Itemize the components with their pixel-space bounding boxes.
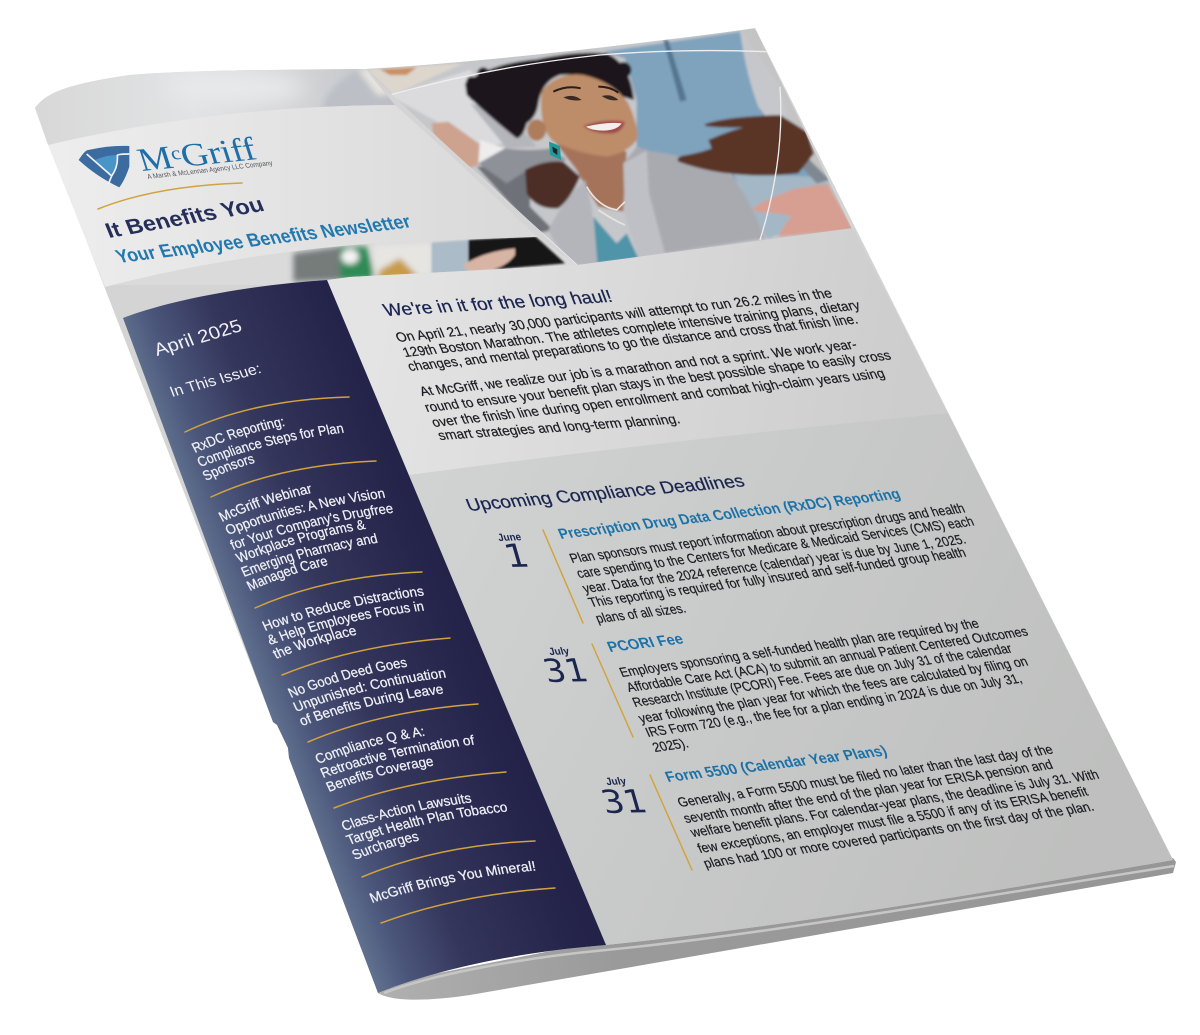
- lower photo strip: [158, 237, 566, 282]
- gold rule: [308, 704, 478, 742]
- panel: compliance deadlines: [409, 413, 1173, 945]
- intro text: changes, and mental preparations to go the distance and cross that finish line.: [405, 311, 860, 374]
- article: good deed: of Benefits During Leave: [300, 686, 444, 726]
- white photo arcs: [365, 51, 781, 265]
- PCORI text: 2025).: [650, 736, 691, 755]
- neck: [553, 140, 627, 212]
- article: lawsuits: Surcharges: [352, 834, 419, 859]
- RxDC text: year. Data for the 2024 reference (calendar) year is due by June 1, 2025.: [580, 532, 968, 596]
- article: compliance Q&A: Benefits Coverage: [326, 758, 434, 792]
- page stack thickness: [378, 858, 1176, 1000]
- Form 5500 text: [675, 742, 1101, 871]
- issue date: April 2025: [151, 316, 245, 360]
- article: distractions: & Help Employees Focus in: [268, 601, 424, 644]
- gold divider: [650, 775, 692, 870]
- intro text: over the finish line during open enrollment and combat high-claim years using: [429, 365, 887, 430]
- PCORI text: Research Institute (PCORI) Fee. Fees are due on July 31 of the calendar: [630, 641, 1015, 710]
- necklace: [587, 187, 625, 225]
- hair: [465, 53, 634, 138]
- dark hand: [525, 161, 580, 208]
- gold rule: [282, 638, 450, 675]
- PCORI text: Affordable Care Act (ACA) to submit an annual Patient Centered Outcomes: [624, 624, 1030, 695]
- date July 31: 31: [539, 652, 592, 690]
- lower background: [409, 413, 1173, 945]
- date July 31: July: [604, 776, 628, 788]
- gold divider: [592, 644, 633, 737]
- PCORI text: IRS Form 720 (e.g., the fee for a plan ending in 2024 is due on July 31,: [643, 671, 1024, 740]
- date July 31: 31: [597, 783, 651, 821]
- article: good deed: No Good Deed Goes: [288, 660, 408, 698]
- top photo strip: [35, 69, 395, 145]
- article: mineral: McGriff Brings You Mineral!: [369, 860, 536, 903]
- article: RxDC: RxDC Reporting:: [191, 418, 285, 453]
- blue shirt: [604, 30, 811, 182]
- jacket: [548, 180, 597, 265]
- RxDC text: Plan sponsors must report information about prescription drugs and health: [567, 501, 967, 566]
- pink hand: [752, 185, 853, 237]
- article: RxDC: Compliance Steps for Plan: [198, 424, 344, 466]
- gold rule: [98, 183, 242, 209]
- newsletter title: It Benefits You: [101, 192, 267, 243]
- article: webinar: McGriff Webinar: [218, 486, 311, 522]
- article: RxDC: Sponsors: [202, 456, 255, 480]
- article: distractions: How to Reduce Distractions: [262, 588, 424, 631]
- article: lawsuits: Class-Action Lawsuits: [342, 794, 472, 830]
- date June 1: June: [496, 531, 523, 544]
- article: distractions: the Workplace: [272, 628, 356, 658]
- photo scene: [367, 28, 852, 265]
- Form 5500 text: welfare benefit plans. For calendar-year plans, the deadline is July 31. With: [687, 767, 1101, 840]
- gold rule: [362, 841, 535, 877]
- gold rule: [211, 461, 376, 497]
- intro text: 129th Boston Marathon. The athletes complete intensive training plans, dietary: [400, 297, 862, 360]
- Form 5500 text: plans had 100 or more covered participants on the first day of the plan.: [701, 799, 1096, 871]
- article: webinar: for Your Company's Drugfree: [230, 505, 393, 550]
- date July 31: July: [547, 646, 571, 658]
- intro text: smart strategies and long-term planning.: [435, 411, 682, 443]
- article: webinar: Managed Care: [246, 558, 328, 591]
- face: [541, 75, 637, 157]
- gold rule: [381, 888, 555, 923]
- logo tagline: A Marsh & McLennan Agency LLC Company: [146, 160, 274, 181]
- sidebar background: [123, 280, 606, 993]
- gold rule: [334, 772, 506, 808]
- article: webinar: Emerging Pharmacy and: [240, 533, 378, 577]
- Form 5500 text: Generally, a Form 5500 must be filed no later than the last day of the: [675, 742, 1056, 810]
- deadline: PCORI: [539, 616, 1030, 755]
- intro text: At McGriff, we realize our job is a marathon and not a sprint. We work year-: [417, 336, 859, 399]
- Form 5500 text: few exceptions, an employer must file a 5500 if any of its ERISA benefit: [695, 784, 1090, 856]
- panel: intro: [327, 228, 948, 475]
- article: distractions: [262, 588, 424, 658]
- logo wordmark: Griff: [176, 131, 262, 174]
- RxDC text: care spending to the Centers for Medicare & Medicaid Services (CMS) each: [574, 514, 976, 581]
- RxDC text: plans of all sizes.: [593, 601, 688, 626]
- article: good deed: Unpunished: Continuation: [292, 670, 446, 711]
- article: webinar: [218, 486, 393, 591]
- gold divider: [543, 530, 583, 623]
- forearm and watch: [802, 158, 829, 184]
- man's jacket: [477, 167, 553, 233]
- teal earring: [549, 142, 561, 160]
- teal shirt: [593, 217, 639, 263]
- deadline: Form 5500: [597, 742, 1101, 871]
- intro heading: We're in it for the long haul!: [380, 286, 615, 320]
- gold rule: [255, 572, 422, 608]
- logo shield: [79, 146, 129, 187]
- article: compliance Q&A: Retroactive Termination of: [320, 734, 474, 778]
- section heading: Upcoming Compliance Deadlines: [463, 471, 747, 515]
- in this issue label: In This Issue:: [167, 360, 264, 401]
- logo wordmark: c: [168, 143, 184, 165]
- left hand: [432, 122, 483, 170]
- newsletter subtitle: Your Employee Benefits Newsletter: [113, 212, 415, 268]
- intro text: [393, 285, 893, 443]
- hero photo: [366, 28, 852, 265]
- eyes and teeth: [553, 87, 622, 131]
- PCORI text: year following the plan year for which the fees are calculated by filing on: [636, 654, 1030, 726]
- gold rule: [185, 397, 349, 432]
- PCORI text: Employers sponsoring a self-funded health plan are required by the: [617, 616, 982, 680]
- intro text: round to ensure your benefit plan stays in the best possible shape to easily cross: [422, 347, 893, 415]
- intro background: [327, 228, 948, 475]
- deadline: RxDC: [496, 486, 976, 626]
- PCORI title: PCORI Fee: [605, 631, 686, 656]
- right hand: [678, 115, 814, 176]
- PCORI text: [617, 616, 1030, 755]
- Form 5500 text: seventh month after the end of the plan year for ERISA pension and: [681, 757, 1055, 826]
- RxDC title: Prescription Drug Data Collection (RxDC) Reporting: [556, 486, 903, 543]
- date June 1: 1: [500, 537, 533, 575]
- header panel: [48, 105, 537, 287]
- RxDC text: [567, 501, 976, 626]
- Form 5500 title: Form 5500 (Calendar Year Plans): [663, 743, 890, 786]
- article: webinar: Workplace Programs &: [234, 520, 366, 562]
- intro text: On April 21, nearly 30,000 participants will attempt to run 26.2 miles in the: [393, 285, 835, 345]
- logo wordmark: M: [133, 140, 174, 179]
- article: webinar: Opportunities: A New Vision: [226, 490, 386, 534]
- panel: sidebar: [123, 280, 606, 993]
- article: lawsuits: Target Health Plan Tobacco: [345, 804, 507, 844]
- lips: [583, 121, 625, 134]
- RxDC text: This reporting is required for fully insured and self-funded group health: [586, 545, 968, 610]
- article: compliance Q&A: Compliance Q & A:: [316, 727, 425, 763]
